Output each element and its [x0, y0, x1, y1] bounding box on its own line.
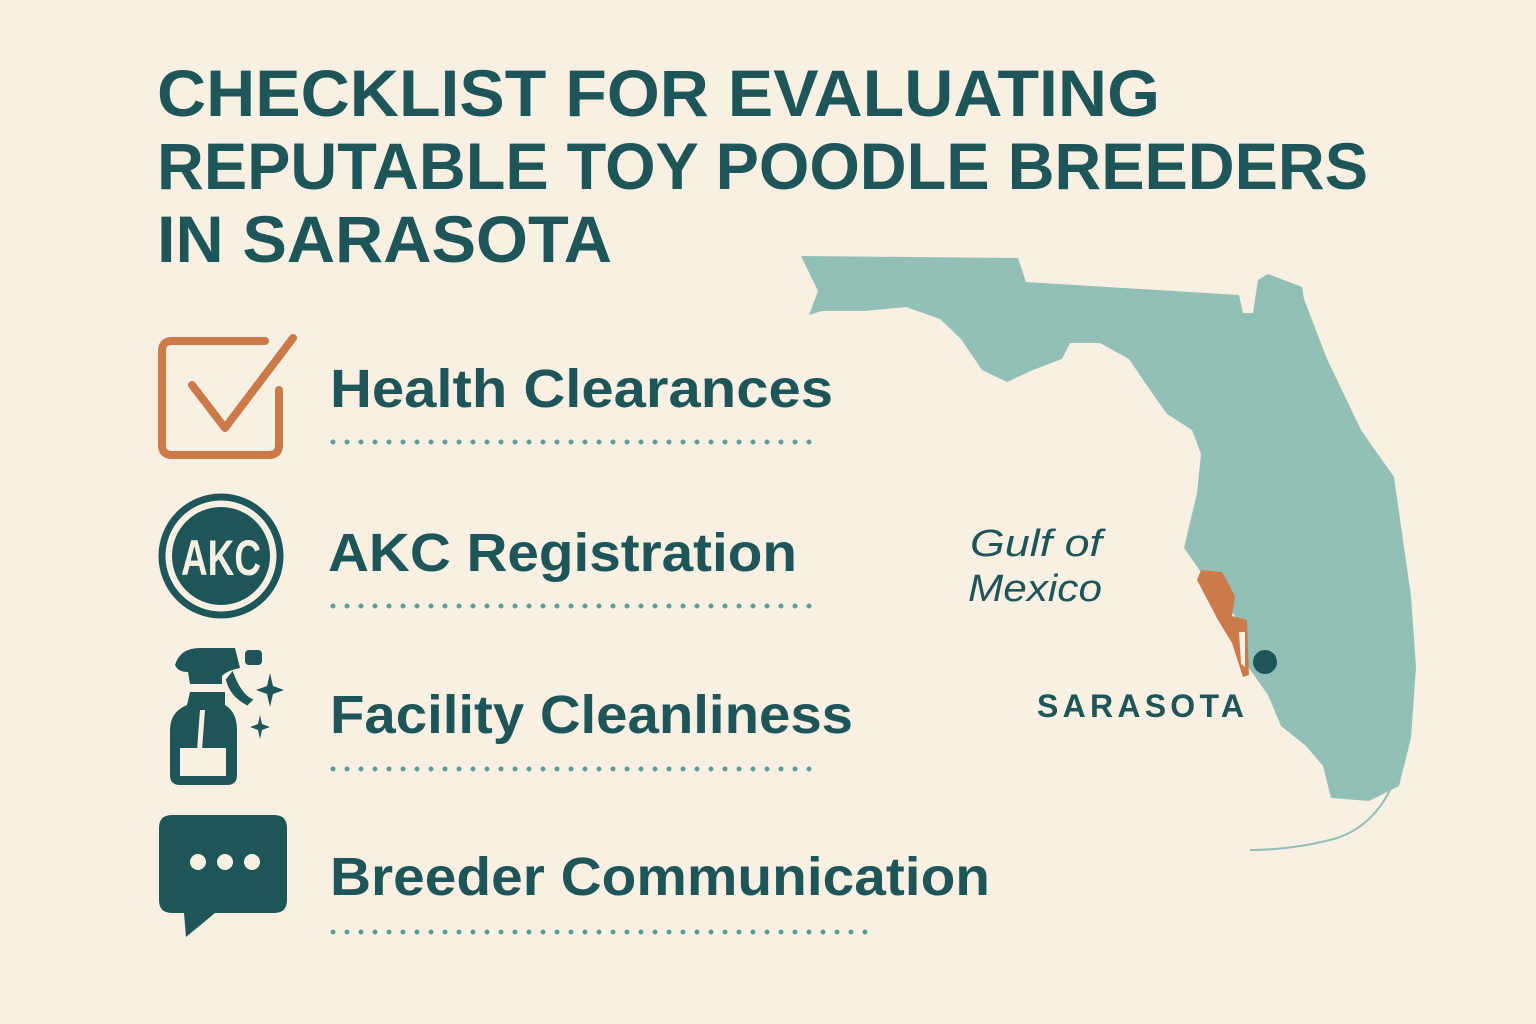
item: health clearances: Health Clearances: [330, 359, 833, 419]
map label: Sarasota: SARASOTA: [1037, 688, 1247, 724]
map: Sarasota county highlight: [1197, 570, 1249, 677]
item: breeder communication: Breeder Communication: [330, 847, 990, 907]
icon: checkbox: [162, 338, 293, 455]
item: AKC registration: AKC Registration: [328, 523, 797, 583]
icon: AKC seal: [162, 497, 280, 615]
map: Sarasota marker: [1253, 650, 1277, 674]
item: facility cleanliness: [170, 648, 853, 785]
item: AKC registration: [162, 497, 820, 615]
map label: Gulf of Mexico: Mexico: [968, 568, 1102, 610]
item: breeder communication: [159, 815, 990, 937]
map label: Gulf of Mexico: [968, 523, 1106, 610]
icon: spray bottle: [170, 648, 284, 785]
item: facility cleanliness: Facility Cleanliness: [330, 685, 853, 745]
item: health clearances: [162, 338, 833, 455]
icon: chat bubble: [159, 815, 287, 937]
map: Florida: [801, 256, 1416, 850]
map label: Gulf of Mexico: Gulf of: [970, 523, 1106, 565]
title: IN SARASOTA: [157, 202, 612, 276]
title: [157, 56, 1368, 276]
title: REPUTABLE TOY POODLE BREEDERS: [157, 129, 1368, 203]
title: CHECKLIST FOR EVALUATING: [157, 56, 1160, 130]
icon: AKC seal: AKC: [181, 530, 261, 586]
